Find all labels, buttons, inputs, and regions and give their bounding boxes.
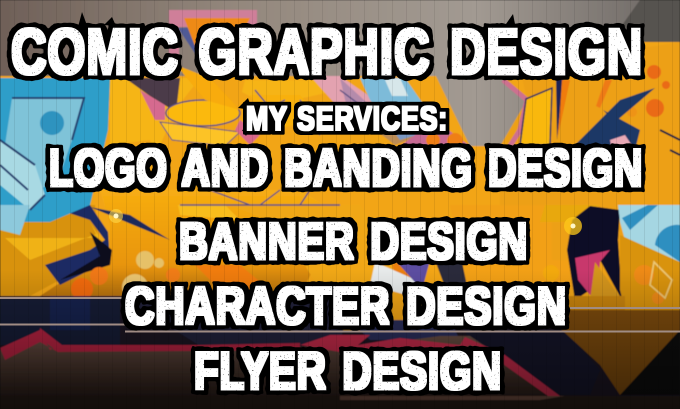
lower dark mural band [0,296,680,409]
upper concrete wall [0,0,680,146]
service: Flyer Design: FLYER DESIGN [194,342,502,401]
center purple and white shards [195,265,270,290]
metal rails [0,298,680,332]
right orange panel [500,42,680,290]
right dark star shape [567,206,622,300]
lens sparkles [109,209,123,223]
gold body and mid lettering [40,190,340,296]
dark gap behind title on left [110,78,200,170]
brown lower wall [0,330,560,396]
blue panel left [0,78,110,222]
floor [0,396,680,409]
service: Banner Design: BANNER DESIGN [179,213,528,271]
yellow bubble letters center [166,100,240,126]
subheading: My services: MY SERVICES: [246,100,448,138]
